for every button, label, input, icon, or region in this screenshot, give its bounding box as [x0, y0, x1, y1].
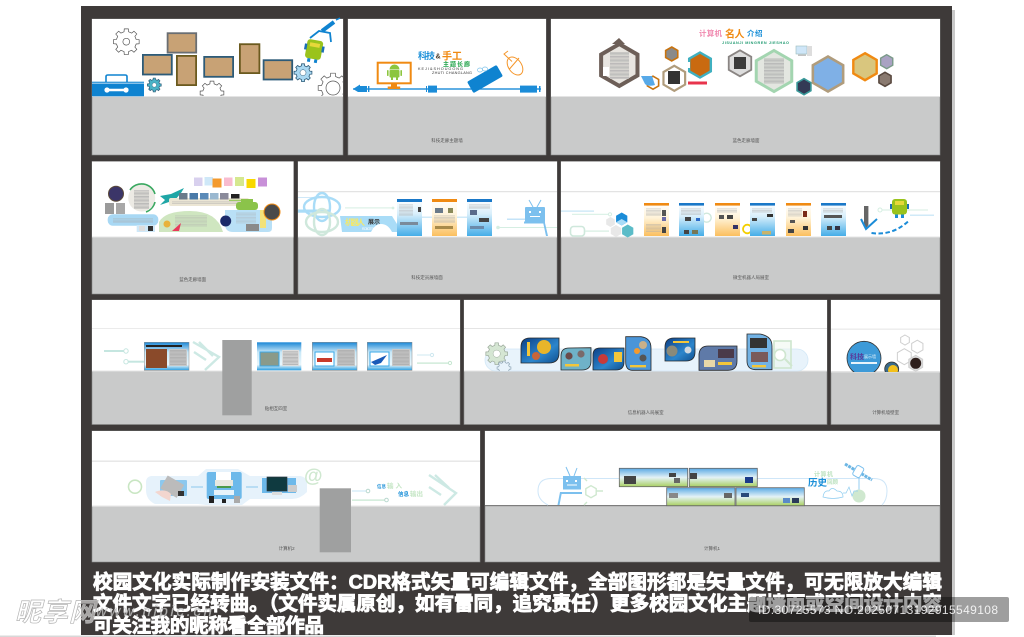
- description text: 校园文化实际制作安装文件：CDR格式矢量可编辑文件，全部图形都是矢量文件，可无限放大编辑: [93, 570, 942, 594]
- pinyin text: KEJI&SHOUGONG: [418, 67, 463, 71]
- robot exhibit banner: ROBOT SHOW: [362, 227, 381, 231]
- description text: [93, 570, 942, 637]
- pale process track: [146, 469, 307, 505]
- icon: scissors: [478, 67, 488, 72]
- panel: robot lab wall: [561, 162, 940, 294]
- icon: teal gear: [147, 78, 161, 92]
- icon: printer block: [207, 472, 242, 503]
- heading: computer celebrities: 名人: [725, 28, 744, 40]
- description text: 文件文字已经转曲。（文件实属原创，如有雷同，追究责任）更多校园文化主题墙面或空间设计内容: [93, 592, 942, 615]
- icon: satellite: [845, 464, 872, 494]
- text: information input: 信息: [377, 483, 386, 490]
- panel: corridor with pillar: [92, 300, 460, 424]
- watermark: site logo: www.nipic.cn: [96, 603, 212, 620]
- text: information output: [398, 489, 423, 498]
- panel: robot display wall: [298, 162, 557, 294]
- icon: orange mouse: [504, 51, 526, 78]
- icon: light blue gear: [294, 64, 312, 82]
- icon: blue pill shape: [467, 65, 503, 93]
- chevrons: [429, 475, 456, 505]
- caption: 蓝色走廊墙面: [179, 276, 207, 283]
- icon: cloud with pulse: [823, 487, 858, 498]
- heading: computer celebrities: [699, 28, 789, 45]
- timeline card photos: [624, 473, 799, 503]
- gray pillar: [320, 488, 351, 552]
- watermark: image ID badge: ID:30725573 NO:20250713192915549108: [758, 603, 998, 617]
- pinyin text: ZHUTI CHANGLANG: [432, 71, 472, 75]
- dashed arc: [872, 222, 908, 234]
- panel: robot workshop wall: [92, 18, 348, 155]
- caption: 蓝色走廊墙面: [732, 137, 760, 144]
- coloured title squares: [194, 177, 267, 188]
- panel: computer celebrities wall: [551, 19, 940, 155]
- icon: desktop computer: [262, 477, 297, 495]
- robot exhibit banner: [340, 216, 397, 232]
- watermark: image ID badge: [749, 597, 1009, 622]
- text: information input: [377, 481, 402, 490]
- heading: computer celebrities: 介绍: [747, 28, 763, 38]
- panel: science collage wall: [92, 162, 294, 294]
- heading: science and handcraft: 科技: [418, 50, 435, 61]
- caption: 科技走廊主题墙: [431, 137, 463, 144]
- exhibit cards: [144, 342, 412, 370]
- decorative rings: [702, 213, 752, 233]
- icon: pencil and chevron: [861, 206, 877, 229]
- text: information output: 信息: [398, 490, 410, 498]
- heading: science and handcraft: 手工: [442, 50, 462, 62]
- icon: tank: [229, 199, 258, 210]
- watermark: site logo: 昵享网: [15, 597, 99, 627]
- photo strip: [169, 193, 249, 206]
- hexagon icons: [606, 212, 633, 238]
- panel: computer history wall: [485, 431, 940, 562]
- text: information input: 输入: [387, 481, 402, 490]
- caption: 计算机墙壁室: [872, 409, 900, 416]
- icon: TV robot: [524, 200, 548, 236]
- blue circuit line: [353, 84, 541, 93]
- icon: globe: [852, 490, 866, 502]
- circuit lines: [352, 489, 388, 502]
- caption: 科技定员展墙面: [411, 274, 443, 281]
- arrow: [246, 486, 258, 488]
- icon: green robot with claw: [302, 18, 340, 64]
- bottom light edge: [0, 636, 936, 637]
- panel: science badge wall: [831, 300, 940, 424]
- info cards: [397, 199, 492, 236]
- leaf photo cards: [521, 334, 772, 370]
- hexagon cluster left: [601, 38, 711, 91]
- icon: TV robot: [558, 467, 582, 505]
- caption: 贴相互四室: [265, 405, 288, 412]
- hexagon cluster right: [853, 53, 893, 86]
- icon: magnifier: [774, 341, 792, 368]
- description text: 可关注我的昵称看全部作品: [93, 614, 324, 637]
- green hump panel: [159, 211, 231, 232]
- heading: science and handcraft: [418, 50, 470, 68]
- panel: science and handcraft corridor: [348, 19, 546, 155]
- circuit lines left: [561, 210, 612, 236]
- text: information output: 输出: [410, 489, 423, 498]
- heading: computer history: 计算机: [814, 470, 833, 478]
- pale track: [485, 349, 808, 371]
- timeline cards: [619, 468, 804, 506]
- pinyin text: [418, 67, 472, 75]
- heading: computer celebrities: JISUANJI MINGREN JIESHAO: [722, 41, 789, 45]
- leaf card photos: [527, 338, 768, 367]
- icon: green robot: [878, 199, 934, 218]
- icon: jet: [160, 188, 184, 205]
- gears: [486, 343, 511, 375]
- badge: 科技: [850, 352, 864, 361]
- icon: molecule: [584, 478, 603, 505]
- photo frames: [143, 33, 292, 85]
- icon: outline corner gear: [318, 72, 343, 96]
- left portraits: [105, 184, 158, 232]
- heading: computer celebrities: 计算机: [699, 28, 722, 38]
- badge: [847, 341, 899, 376]
- panel: information input output wall: [92, 431, 480, 562]
- caption: 信息机器人局展室: [628, 409, 664, 416]
- circuit lines: [104, 349, 452, 365]
- caption: 微宝机器人局展室: [733, 274, 769, 281]
- icon: power ring: [128, 480, 142, 493]
- icon: at sign: @: [304, 466, 323, 487]
- heading: science and handcraft: &: [436, 54, 441, 60]
- hexagon cluster centre: [729, 46, 843, 95]
- icon: keyboard and hand: [155, 475, 187, 501]
- robot exhibit banner: 机器人: [345, 217, 365, 227]
- panel: photo leaves wall: [464, 300, 827, 424]
- blue info box: [225, 204, 280, 232]
- chevrons: [193, 342, 219, 370]
- icon: atom rings: [298, 193, 340, 235]
- page shadow: [951, 10, 955, 635]
- hexagon outlines: [897, 335, 923, 371]
- gray pillar: [222, 340, 252, 415]
- icon: toolbox: [92, 75, 144, 96]
- robot exhibit banner: 展示: [368, 219, 380, 226]
- connecting lines: [345, 207, 557, 229]
- heading: computer history: 历史: [808, 477, 827, 489]
- caption: 计算机2: [279, 545, 295, 552]
- heading: science and handcraft: 主题长廊: [443, 60, 470, 68]
- heading: computer history: 回顾: [827, 479, 838, 486]
- arrow: [191, 486, 203, 488]
- icon: orange monitor: [378, 63, 411, 89]
- info cards: [644, 203, 846, 236]
- caption: 计算机1: [704, 545, 720, 552]
- badge: 展示墙: [864, 353, 876, 359]
- heading: computer history: [808, 470, 838, 489]
- pale rounded track: [538, 478, 887, 505]
- watermark: site logo: [15, 597, 212, 627]
- icon: outline gear: [113, 29, 139, 55]
- icon: outline half gear: [200, 80, 224, 96]
